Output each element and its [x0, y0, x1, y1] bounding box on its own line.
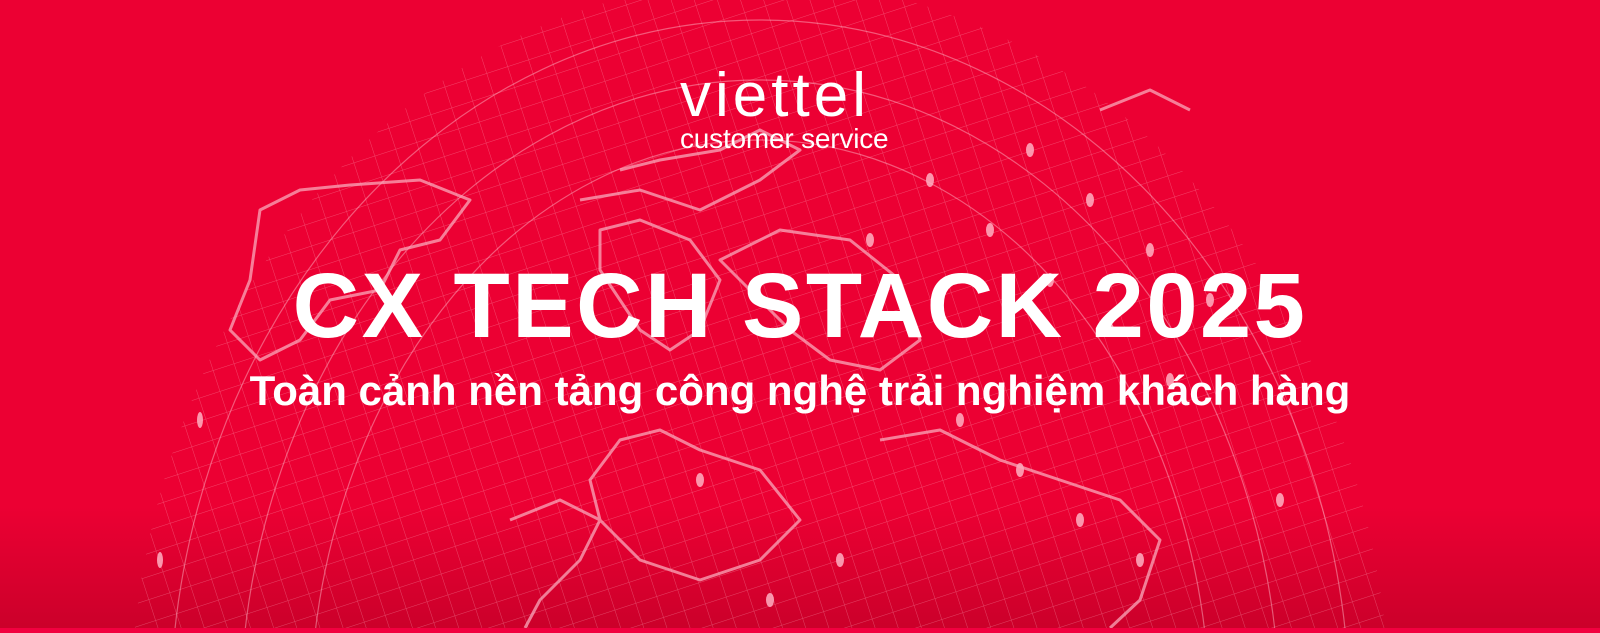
- globe: [135, 0, 1384, 628]
- logo: [680, 61, 888, 154]
- subtitle: Toàn cảnh nền tảng công nghệ trải nghiệm khách hàng: [250, 367, 1350, 414]
- continent outlines: [230, 90, 1190, 628]
- title: CX TECH STACK 2025: [293, 255, 1307, 357]
- logo subtitle: customer service: [680, 123, 888, 154]
- bottom strip: [0, 628, 1600, 633]
- logo wordmark: viettel: [680, 61, 870, 130]
